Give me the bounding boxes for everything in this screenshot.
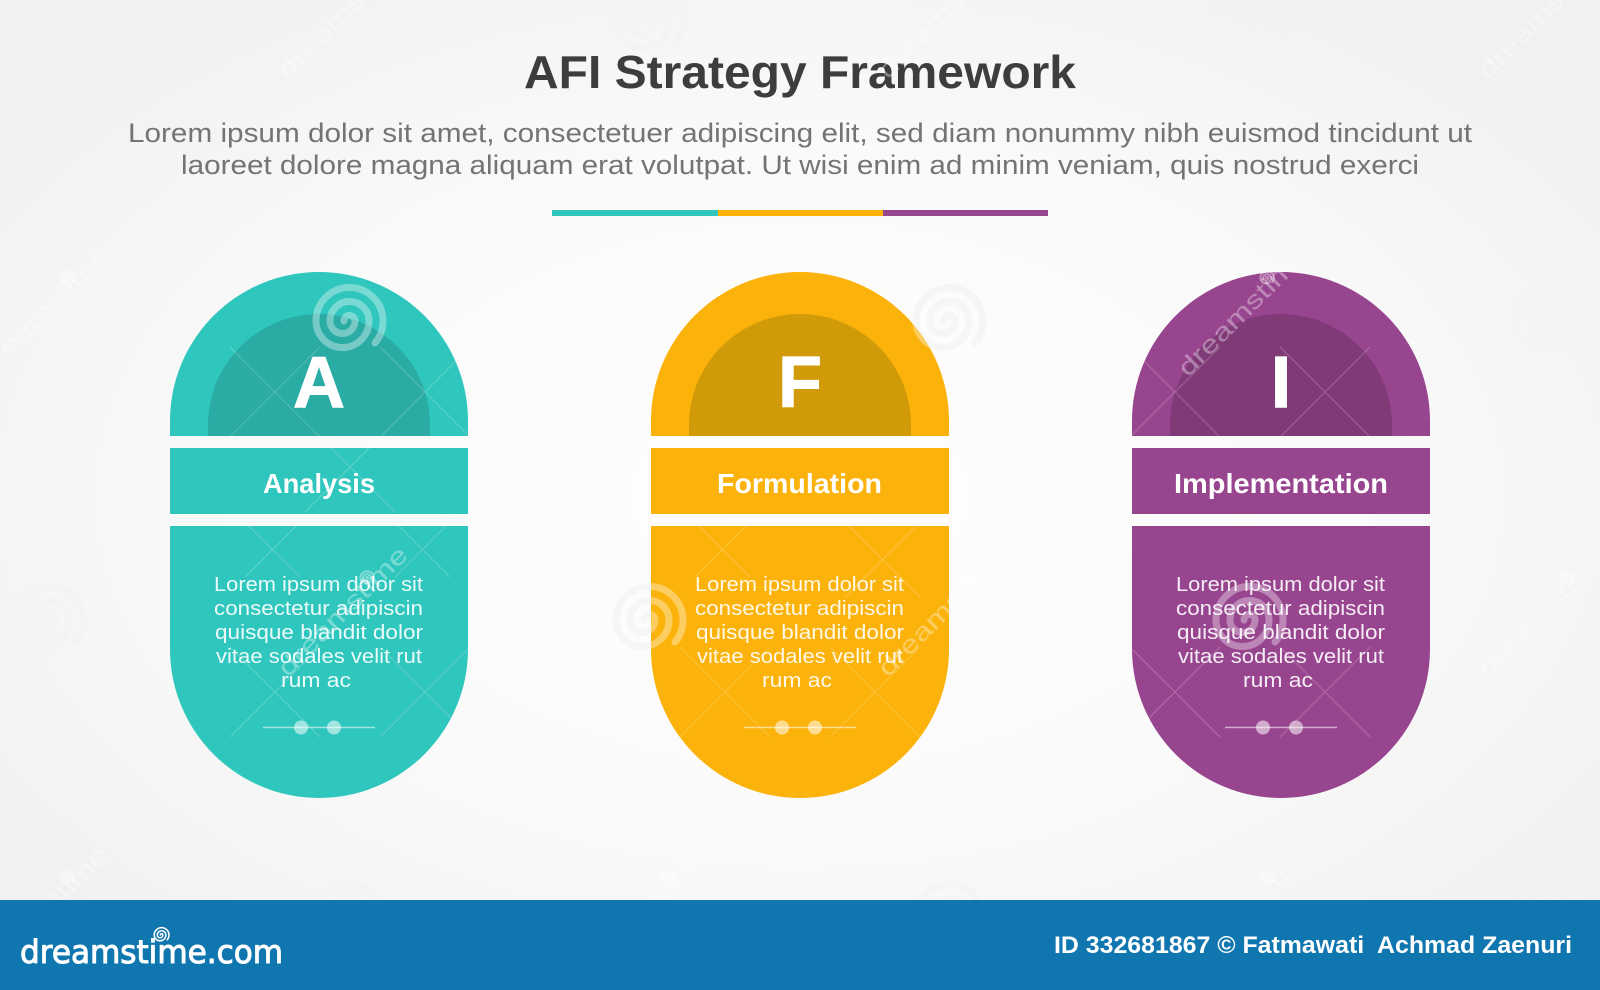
watermark crossing lines — [230, 347, 1370, 737]
name band — [651, 448, 949, 514]
lower body — [1132, 526, 1430, 798]
name band — [170, 448, 468, 514]
panel: implementation — [1132, 272, 1430, 798]
upper dome — [1132, 272, 1430, 436]
panel: analysis — [170, 272, 468, 798]
watermark diagonal text: dreamstime — [572, 841, 714, 982]
lower body — [170, 526, 468, 798]
subtitle — [128, 118, 1473, 180]
watermark diagonal text: dreamstime — [272, 541, 414, 682]
description: Lorem ipsum dolor sit — [214, 574, 423, 596]
lower body — [651, 526, 949, 798]
letter F: F — [778, 343, 822, 423]
description: quisque blandit dolor — [215, 622, 423, 644]
footer logo: dreamstime.com — [20, 933, 283, 971]
watermark diagonal text: dreamstime — [1172, 241, 1314, 382]
description: rum ac — [281, 670, 351, 692]
description — [695, 574, 904, 692]
inner dome — [208, 314, 430, 436]
description: vitae sodales velit rut — [216, 646, 422, 668]
description: Lorem ipsum dolor sit — [695, 574, 904, 596]
name band — [1132, 448, 1430, 514]
description: quisque blandit dolor — [696, 622, 904, 644]
description: Lorem ipsum dolor sit — [1176, 574, 1385, 596]
tri-colour divider bar — [552, 210, 1048, 216]
description: consectetur adipiscin — [214, 598, 423, 620]
subtitle: laoreet dolore magna aliquam erat volutpat. Ut wisi enim ad minim veniam, quis nostrud exerci — [181, 150, 1419, 180]
description: rum ac — [762, 670, 832, 692]
footer credit: ID 332681867 © Fatmawati Achmad Zaenuri — [1054, 932, 1572, 959]
dots divider — [263, 720, 375, 734]
subtitle: Lorem ipsum dolor sit amet, consectetuer adipiscing elit, sed diam nonummy nibh euismod tincidunt ut — [128, 118, 1473, 148]
description: quisque blandit dolor — [1177, 622, 1385, 644]
name label: Analysis — [263, 468, 375, 499]
inner dome — [1170, 314, 1392, 436]
description: vitae sodales velit rut — [1178, 646, 1384, 668]
description — [214, 574, 423, 692]
dots divider — [1225, 720, 1337, 734]
name label: Implementation — [1174, 468, 1388, 499]
footer bar — [0, 900, 1600, 990]
dots divider — [744, 720, 856, 734]
watermark diagonal text: dreamstime — [572, 241, 714, 382]
watermark diagonal text: dreamstime — [872, 541, 1014, 682]
inner dome — [689, 314, 911, 436]
title: AFI Strategy Framework — [524, 46, 1076, 98]
letter I: I — [1271, 343, 1291, 423]
description — [1176, 574, 1385, 692]
name label: Formulation — [717, 468, 882, 499]
description: consectetur adipiscin — [695, 598, 904, 620]
upper dome — [651, 272, 949, 436]
panel: formulation — [651, 272, 949, 798]
description: vitae sodales velit rut — [697, 646, 903, 668]
letter A: A — [293, 343, 345, 423]
description: consectetur adipiscin — [1176, 598, 1385, 620]
watermark diagonal text: dreamstime — [1472, 541, 1600, 682]
description: rum ac — [1243, 670, 1313, 692]
upper dome — [170, 272, 468, 436]
watermark diagonal text: dreamstime — [1172, 841, 1314, 982]
